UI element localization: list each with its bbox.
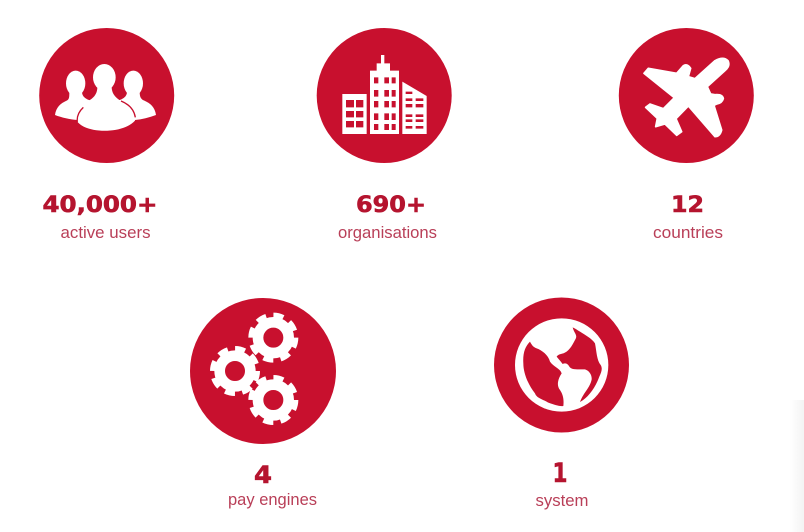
- icon: airplane in red circle: [619, 28, 754, 163]
- label: countries: countries: [653, 223, 723, 242]
- icon: gears in red circle: [190, 298, 336, 444]
- number: 40,000+: 40,000+: [42, 193, 158, 218]
- number: 690+: 690+: [356, 193, 426, 218]
- panel: system: [494, 298, 629, 510]
- panel: active users: [39, 28, 174, 242]
- panel: pay engines: [190, 298, 336, 509]
- number: 1: 1: [552, 458, 568, 489]
- label: pay engines: pay engines: [228, 490, 317, 509]
- label: active users: active users: [60, 223, 150, 242]
- icon: buildings in red circle: [317, 28, 452, 163]
- icon: globe in red circle: [494, 298, 629, 432]
- panel: organisations: [317, 28, 452, 242]
- icon: people in red circle: [39, 28, 174, 163]
- number: 12: 12: [671, 193, 704, 218]
- label: organisations: organisations: [338, 223, 437, 242]
- number: 4: 4: [254, 461, 272, 489]
- label: system: system: [536, 491, 588, 510]
- panel: countries: [619, 28, 754, 242]
